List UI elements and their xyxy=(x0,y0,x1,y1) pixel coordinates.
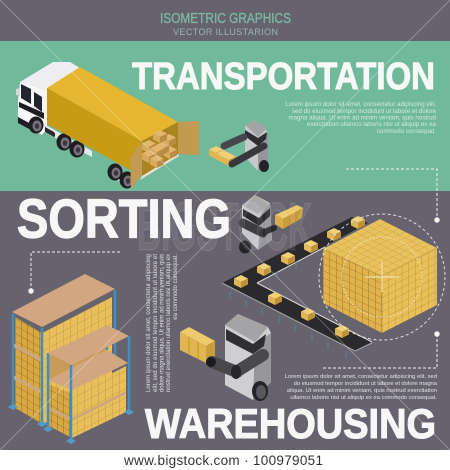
header subtitle: VECTOR ILLUSTARION xyxy=(173,27,278,37)
text block: warehousing: ullamco laboris nisi ut aliquip ex ea commodo consequat. xyxy=(290,395,437,401)
text block: transportation: magna aliqua. Ut enim ad minim veniam, quis nostrud xyxy=(288,114,437,122)
header title: ISOMETRIC GRAPHICS xyxy=(160,11,291,27)
sorting robot xyxy=(239,195,303,254)
stock footer: www.bigstock.com · 100979051 xyxy=(123,453,323,468)
text block: warehousing: Lorem ipsum dolor sit amet, consectetur adipiscing elit, sed xyxy=(285,374,437,380)
shelving: large unit xyxy=(8,274,115,427)
rotated text block: sorting: ea commodo consequat. xyxy=(173,254,179,320)
text block: warehousing: do eiusmod tempor incididunt ut labore et dolore magna xyxy=(294,381,438,387)
rotated text block: sorting: elit, sed do eiusmod tempor incididunt ut labore et xyxy=(153,254,159,392)
text block: transportation: Lorem ipsum dolor sit amet, consectetur adipiscing elit, xyxy=(285,101,436,108)
text block: warehousing: aliqua. Ut enim ad minim veniam, quis nostrud exercitation xyxy=(287,388,437,394)
rotated text block: sorting: Lorem ipsum dolor sit amet, consectetur adipiscing xyxy=(146,254,152,392)
shelving: small unit xyxy=(43,325,134,444)
connector: shelf dashed line xyxy=(28,252,120,294)
icon: truck xyxy=(16,62,199,189)
conveyor belt xyxy=(222,216,372,358)
icon: transport robot xyxy=(209,120,269,172)
connector: warehouse text dashed line xyxy=(321,331,440,368)
grey lower panel xyxy=(0,191,450,450)
warehouse robot xyxy=(180,314,271,401)
connector: sorting dashed line xyxy=(346,169,440,223)
green transportation band xyxy=(0,41,450,191)
dashed target circles xyxy=(319,214,445,340)
text block: transportation xyxy=(285,101,437,135)
rotated text block: sorting: nostrud exercitation ullamco laboris nisi ut aliquip ex xyxy=(166,254,172,392)
pallet cube of boxes xyxy=(323,219,437,333)
rotated text block: sorting xyxy=(146,254,179,392)
text block: warehousing xyxy=(285,374,438,401)
rotated text block: sorting: dolore magna aliqua. Ut enim ad minim veniam, quis xyxy=(160,254,166,392)
text block: transportation: commodo consequat. xyxy=(377,128,436,135)
heading: sorting: SORTING xyxy=(17,188,231,250)
top header band xyxy=(0,0,450,41)
text block: transportation: sed do eiusmod tempor incididunt ut labore et dolore xyxy=(292,108,437,115)
text block: transportation: exercitation ullamco laboris nisi ut aliquip ex ea xyxy=(307,121,437,128)
